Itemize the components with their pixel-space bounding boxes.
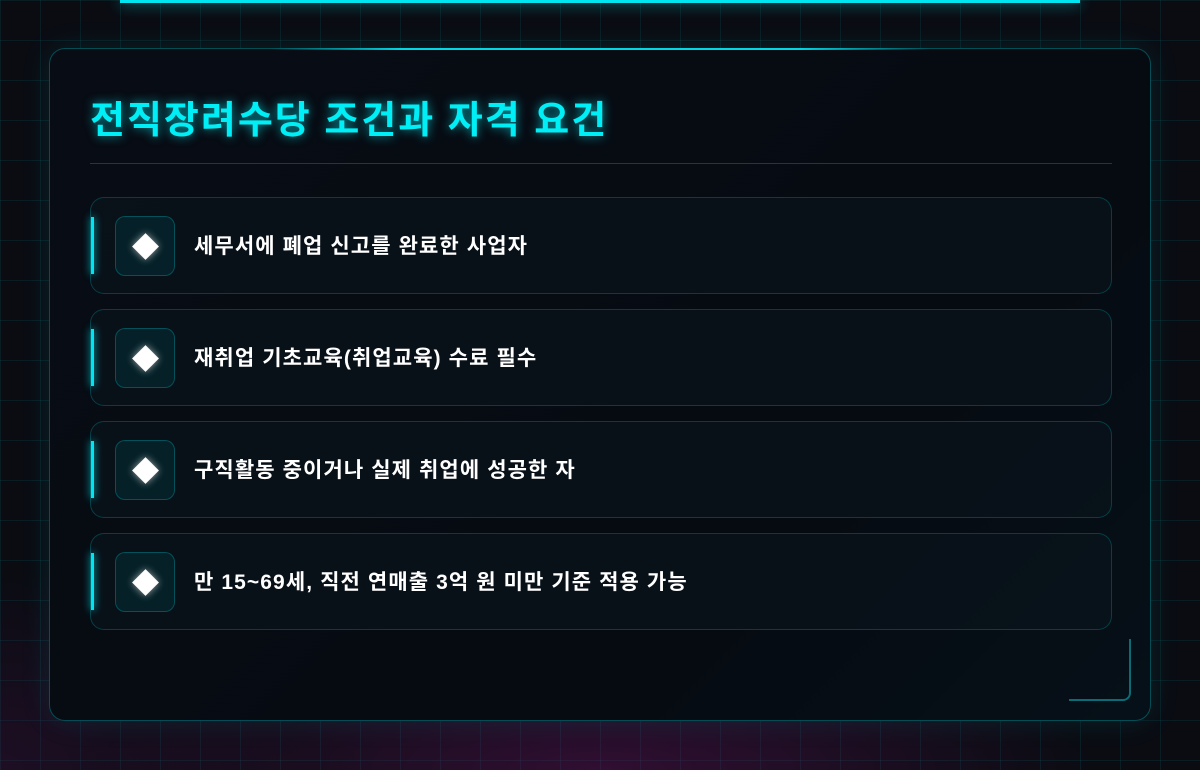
item 1 (90, 197, 1112, 294)
item 4: 만 15~69세, 직전 연매출 3억 원 미만 기준 적용 가능 (194, 571, 688, 594)
item 4 (90, 533, 1112, 630)
item 1: 세무서에 폐업 신고를 완료한 사업자 (194, 235, 528, 258)
item 3: 구직활동 중이거나 실제 취업에 성공한 자 (194, 459, 576, 482)
title: 전직장려수당 조건과 자격 요건 (90, 100, 608, 142)
corner accent (1069, 639, 1131, 701)
item 2 (90, 309, 1112, 406)
item 2: 재취업 기초교육(취업교육) 수료 필수 (194, 347, 537, 370)
item 3 (90, 421, 1112, 518)
